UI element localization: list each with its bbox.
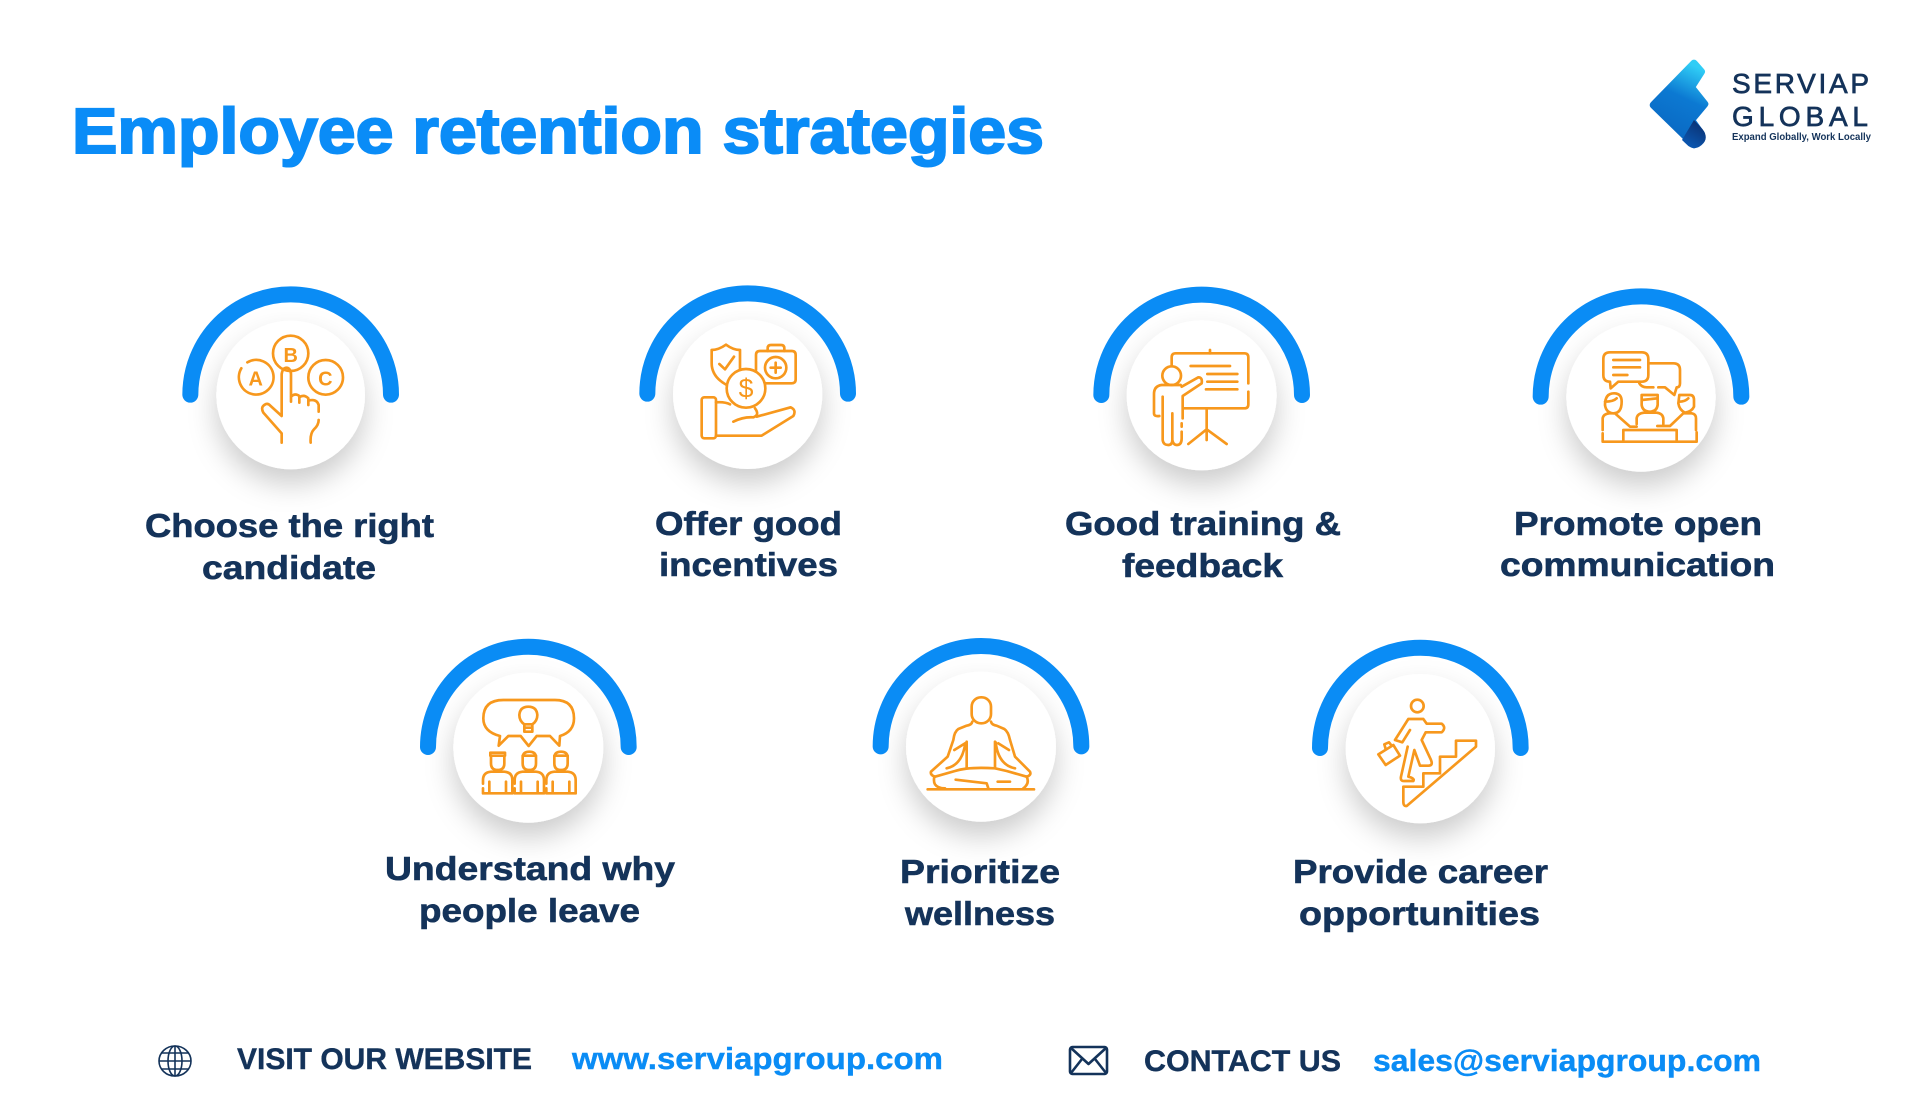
icon: person meditating <box>928 697 1034 789</box>
blue arc <box>1101 295 1302 395</box>
icon: logo mark <box>1653 63 1706 148</box>
badge with icon <box>1541 296 1741 472</box>
blue arc <box>881 646 1081 746</box>
label <box>385 850 676 929</box>
label <box>1293 853 1548 932</box>
contact email: sales@serviapgroup.com <box>1373 1043 1761 1078</box>
label: communication <box>1500 546 1775 583</box>
label: wellness <box>904 895 1055 932</box>
blue arc <box>647 293 848 394</box>
label: Provide career <box>1293 853 1548 890</box>
panel: prioritize wellness <box>881 646 1081 932</box>
badge with icon <box>428 647 629 823</box>
label <box>145 507 434 586</box>
icon: globe <box>159 1046 191 1076</box>
label: feedback <box>1122 547 1284 584</box>
icon: hand choosing ABC: C <box>318 368 333 390</box>
icon: three people sharing an idea <box>483 700 576 793</box>
label: Good training & <box>1065 505 1341 542</box>
panel: good training and feedback <box>1065 295 1341 584</box>
label: candidate <box>202 549 376 586</box>
label <box>1065 505 1341 584</box>
blue arc <box>1320 648 1521 748</box>
label <box>900 853 1060 932</box>
logo tagline: Expand Globally, Work Locally <box>1732 131 1871 143</box>
label: Promote open <box>1514 505 1762 542</box>
label: Prioritize <box>900 853 1060 890</box>
icon: team meeting with speech bubbles <box>1603 352 1697 442</box>
title: Employee retention strategies <box>72 95 1044 167</box>
icon: hand choosing ABC <box>239 336 343 443</box>
panel: choose the right candidate <box>145 294 434 586</box>
blue arc <box>1541 296 1741 397</box>
badge with icon <box>1101 295 1302 470</box>
icon: envelope <box>1070 1047 1107 1074</box>
icon: presenter at board <box>1154 350 1248 445</box>
panel: offer good incentives <box>647 293 848 583</box>
logo wordmark: SERVIAP <box>1732 68 1869 99</box>
panel: provide career opportunities <box>1293 648 1548 932</box>
badge with icon <box>881 646 1081 822</box>
website url: www.serviapgroup.com <box>571 1041 943 1076</box>
panel: promote open communication <box>1500 296 1775 583</box>
label: incentives <box>659 546 838 583</box>
icon: businessman climbing stairs <box>1378 700 1476 806</box>
badge with icon <box>647 293 848 469</box>
website label: VISIT OUR WEBSITE <box>237 1043 532 1076</box>
icon: hand with coin, shield and medical case: $ <box>739 374 754 404</box>
label <box>1500 505 1775 583</box>
panel: understand why people leave <box>385 647 676 929</box>
label: Offer good <box>655 505 842 542</box>
icon: hand choosing ABC: A <box>248 368 263 390</box>
badge with icon <box>1320 648 1521 823</box>
footer: contact <box>1070 1043 1761 1078</box>
label: Understand why <box>385 850 676 887</box>
label: people leave <box>419 892 640 929</box>
logo wordmark second line: GLOBAL <box>1732 101 1868 132</box>
icon: hand with coin, shield and medical case <box>702 345 796 438</box>
label: opportunities <box>1299 895 1540 932</box>
logo <box>1653 63 1871 148</box>
label: Choose the right <box>145 507 434 544</box>
footer: website <box>159 1041 943 1076</box>
icon: hand choosing ABC: B <box>283 345 298 367</box>
contact label: CONTACT US <box>1144 1045 1341 1078</box>
blue arc <box>190 294 391 395</box>
blue arc <box>428 647 629 747</box>
label <box>655 505 842 583</box>
badge with icon <box>190 294 391 469</box>
